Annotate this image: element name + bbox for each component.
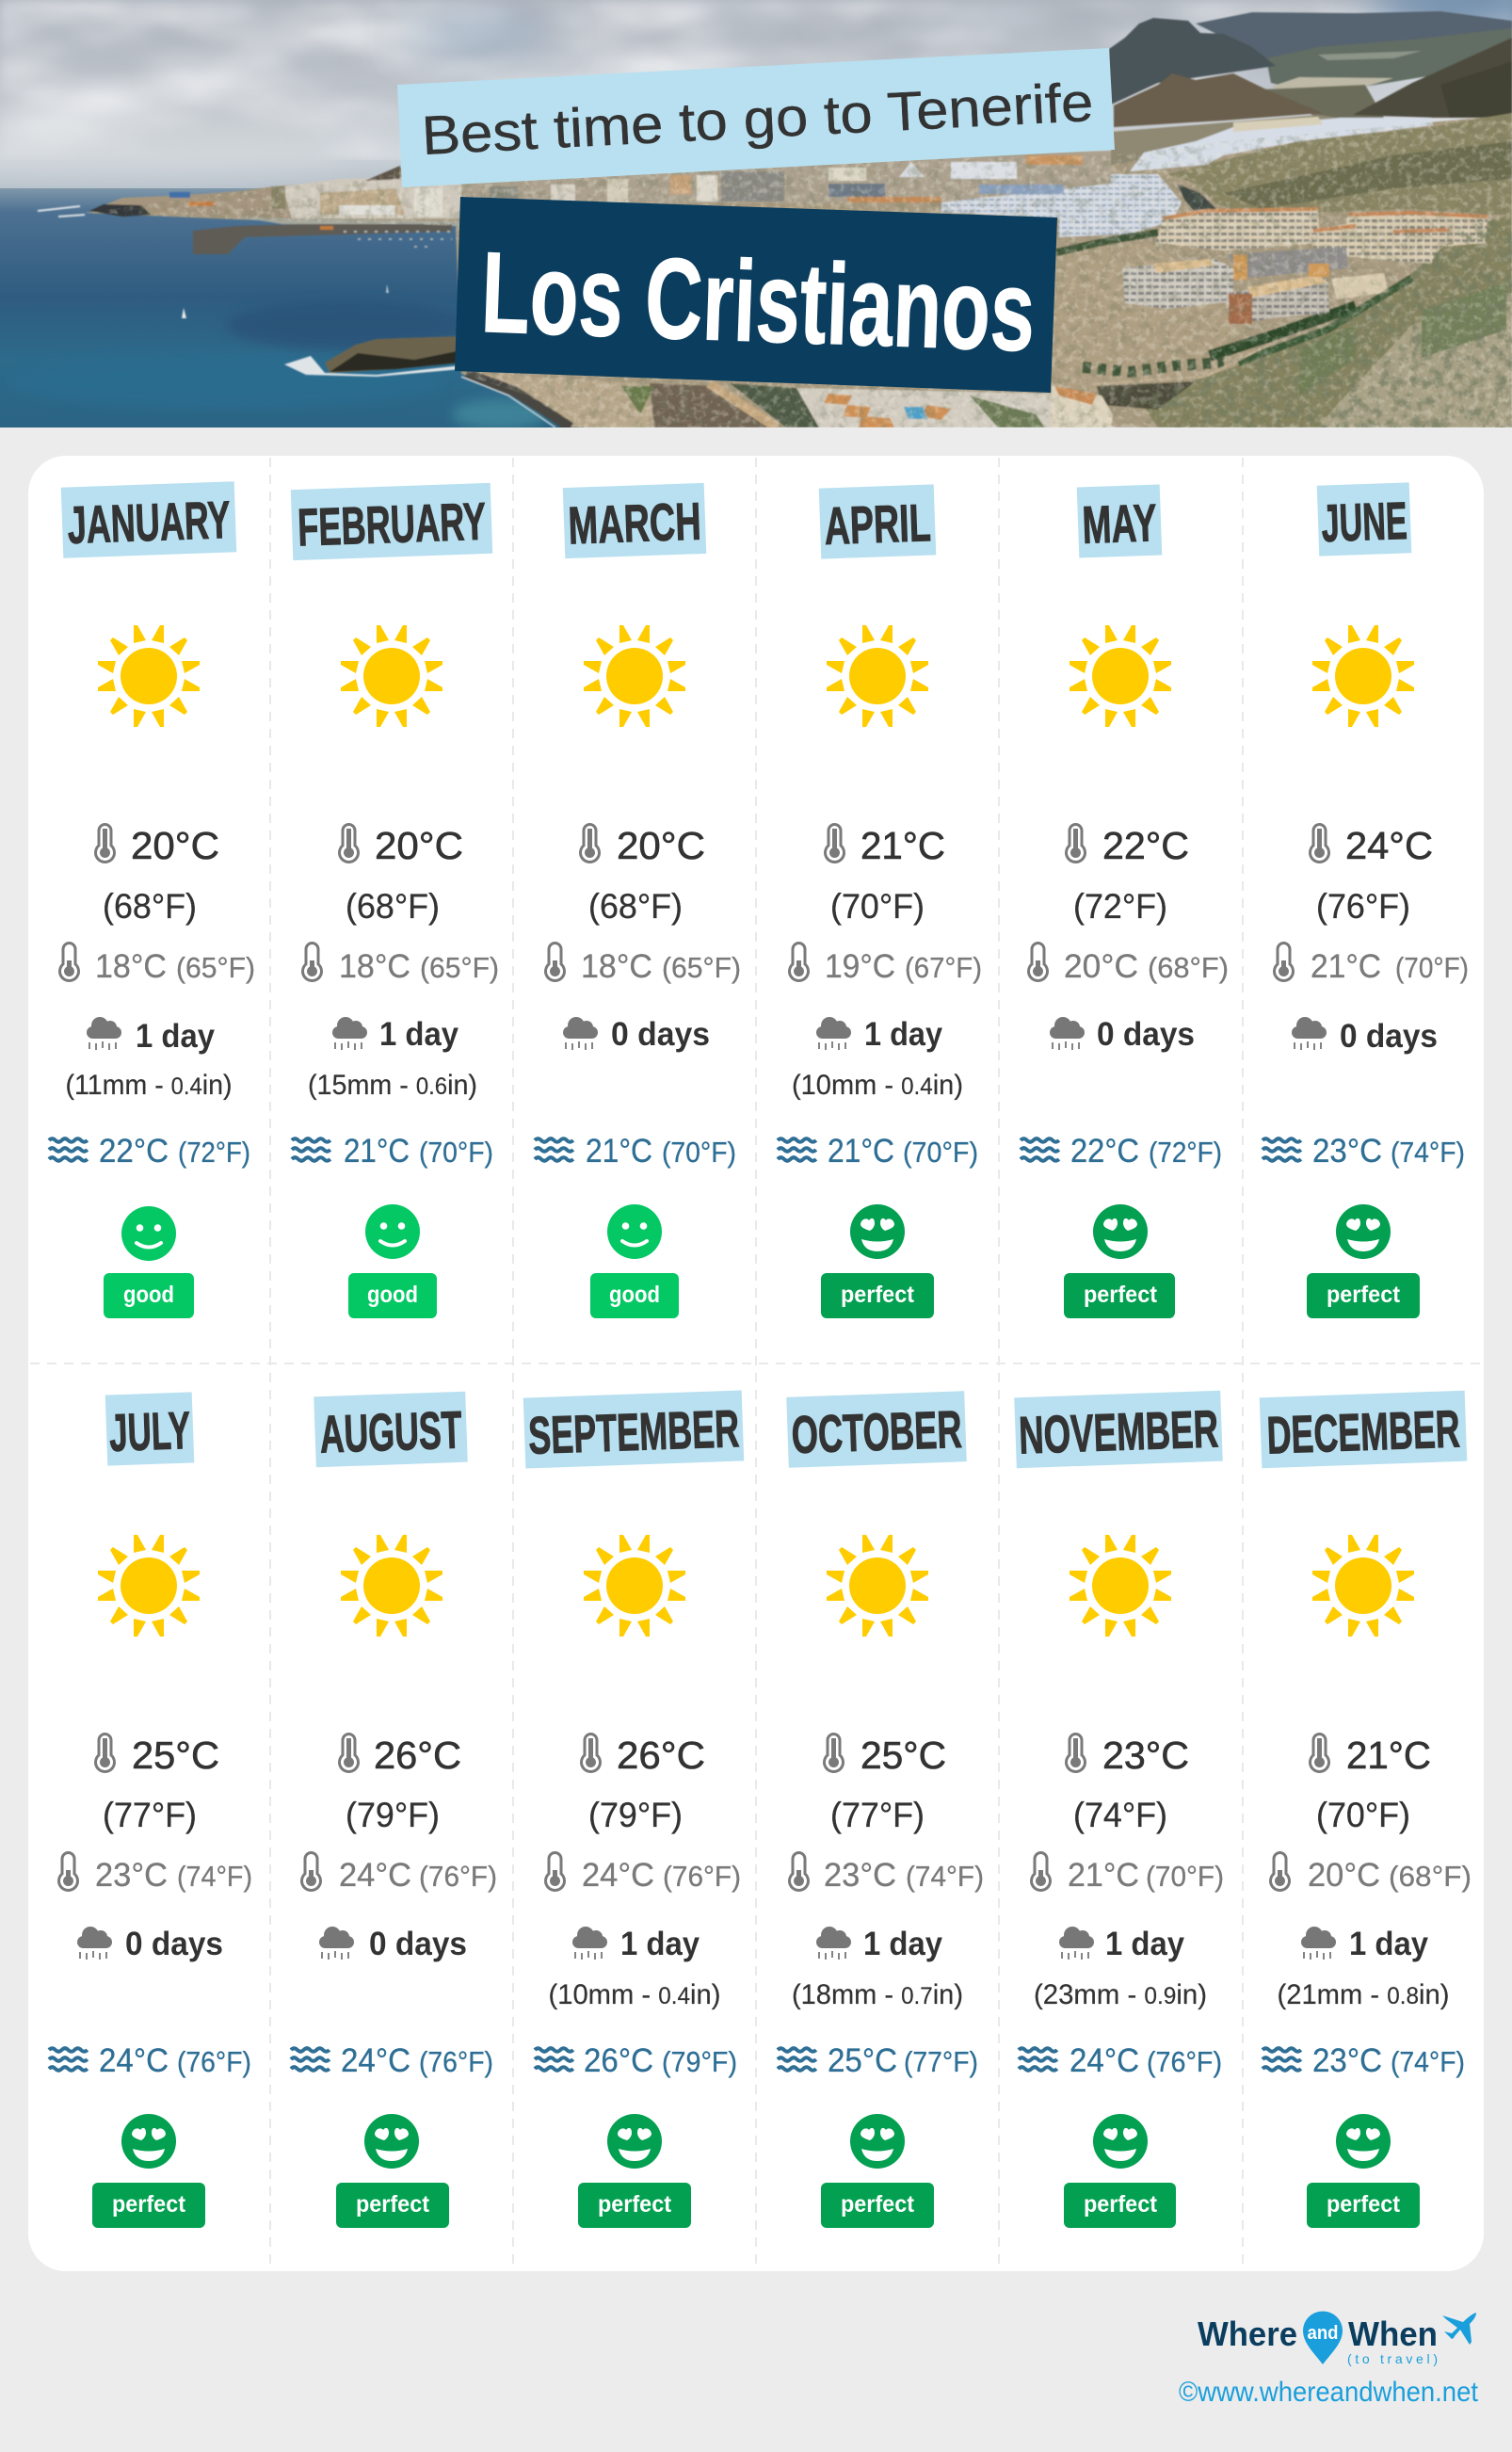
rainfall: 0 days (369, 1926, 467, 1962)
icon: sun (1070, 1535, 1171, 1637)
banner: Los Cristianos: Los Cristianos (479, 228, 1037, 376)
air temperature low: (65°F) (176, 951, 255, 984)
month: August (291, 1392, 497, 2228)
banner: Los Cristianos (455, 197, 1057, 393)
sea temperature: 24°C (1070, 2042, 1139, 2079)
air temperature low: 23°C (824, 1857, 896, 1894)
air temperature high: (77°F) (830, 1796, 925, 1834)
month: December (1260, 1391, 1472, 2228)
lower scrub hillside (1139, 215, 1512, 427)
town behind banners (456, 151, 1111, 203)
banner: Best time to go to Tenerife (397, 48, 1115, 187)
sea temperature: 21°C (828, 1133, 894, 1170)
air temperature high: 24°C (1345, 824, 1433, 867)
rating: perfect (92, 2114, 205, 2228)
air temperature low: (74°F) (177, 1860, 252, 1893)
air temperature low (788, 942, 982, 985)
March label: MARCH (568, 492, 702, 555)
valley floor (1262, 85, 1384, 118)
air temperature low: (65°F) (420, 951, 499, 984)
June label (1317, 482, 1411, 557)
icon: sun (584, 625, 685, 727)
November label: NOVEMBER (1018, 1398, 1219, 1465)
icon: map pin (1303, 2311, 1343, 2364)
rating: perfect: perfect (112, 2191, 186, 2218)
September label (523, 1390, 744, 1469)
rating: perfect: perfect (1327, 1282, 1401, 1308)
air temperature high: 25°C (132, 1734, 219, 1777)
air temperature low: 18°C (581, 948, 652, 985)
air temperature high: (76°F) (1316, 887, 1410, 926)
month: July (49, 1392, 252, 2228)
air temperature high: (68°F) (588, 887, 683, 926)
sea temperature (535, 1133, 736, 1170)
air temperature low (300, 1851, 497, 1894)
air temperature high: 22°C (1102, 824, 1189, 867)
sea temperature (778, 2042, 978, 2079)
sea temperature: (72°F) (1149, 1136, 1222, 1169)
air temperature low: (74°F) (906, 1860, 984, 1893)
logo: Where and When (to travel) (1198, 2311, 1476, 2366)
rating: perfect (1064, 1204, 1175, 1318)
air temperature high (579, 823, 705, 926)
sea temperature (49, 2042, 251, 2079)
air temperature high: 21°C (861, 824, 945, 867)
rainfall: 1 day (863, 1926, 943, 1962)
air temperature high (823, 1733, 946, 1834)
rainfall: 0 days (125, 1926, 223, 1962)
land base (85, 115, 1512, 427)
air temperature high (824, 823, 945, 926)
bottom resort (796, 388, 1116, 427)
air temperature high (94, 1733, 219, 1834)
air temperature low: 23°C (95, 1857, 168, 1894)
month: January (49, 481, 255, 1318)
October label (786, 1391, 967, 1468)
rating: perfect: perfect (1084, 2191, 1158, 2218)
air temperature low (57, 1851, 252, 1894)
sea temperature (1021, 1133, 1222, 1170)
air temperature high: (72°F) (1073, 887, 1167, 926)
January label (61, 481, 236, 558)
rainfall (792, 1926, 963, 2010)
January label: JANUARY (67, 490, 232, 555)
logo: Where and When (to travel): (to travel) (1347, 2351, 1438, 2366)
air temperature high (1065, 1733, 1189, 1834)
sea temperature: (74°F) (1391, 2045, 1465, 2078)
sea temperature: (76°F) (419, 2045, 493, 2078)
sea temperature (778, 1133, 978, 1170)
rainfall: (18mm - 0.7in) (792, 1979, 963, 2010)
sea temperature: 22°C (1070, 1133, 1139, 1170)
scrub hillside upper (1167, 113, 1512, 215)
air temperature high (94, 823, 219, 926)
icon: sun (98, 625, 200, 727)
air temperature low: 20°C (1308, 1857, 1380, 1894)
icon: plane (1442, 2313, 1476, 2345)
August label (314, 1392, 468, 1467)
rainfall (792, 1016, 963, 1101)
icon: sun (341, 625, 442, 727)
rainfall: (10mm - 0.4in) (548, 1979, 720, 2010)
month: November (1014, 1391, 1224, 2228)
April label (819, 484, 936, 559)
beach strip (240, 217, 459, 226)
air temperature low: 24°C (339, 1857, 411, 1894)
air temperature high: (68°F) (103, 887, 197, 926)
air temperature high: 20°C (131, 824, 219, 867)
rainfall: 1 day (1105, 1926, 1185, 1962)
hedge rows (1056, 233, 1158, 252)
header photo: Los Cristianos coastline (0, 0, 1512, 429)
November label (1014, 1391, 1223, 1468)
sea temperature (1263, 1133, 1465, 1170)
air temperature low: 18°C (339, 948, 410, 985)
rainfall: 1 day (379, 1016, 459, 1053)
far ridge (1196, 10, 1512, 59)
banner: Best time to go to Tenerife: Best time to go to Tenerife (420, 72, 1095, 167)
brown double hill (1114, 73, 1323, 127)
August label: AUGUST (319, 1399, 463, 1464)
rainfall (1050, 1016, 1195, 1053)
sea temperature: 25°C (828, 2042, 897, 2079)
rainfall: 0 days (1097, 1016, 1195, 1053)
air temperature high (1065, 823, 1189, 926)
rainfall: (15mm - 0.6in) (308, 1070, 477, 1101)
icon: sun (98, 1535, 200, 1637)
sea temperature: (70°F) (903, 1136, 978, 1169)
sea temperature: 22°C (99, 1133, 169, 1170)
logo: Where and When (to travel): When (1348, 2315, 1438, 2353)
sea temperature (1263, 2042, 1465, 2079)
rainfall: (11mm - 0.4in) (66, 1070, 232, 1101)
air temperature low: (68°F) (1148, 951, 1229, 984)
rating: perfect (1064, 2114, 1176, 2228)
air temperature high: 26°C (617, 1734, 705, 1777)
sea temperature: (76°F) (1147, 2045, 1222, 2078)
rainfall: 1 day (136, 1018, 216, 1055)
sea temperature: 21°C (344, 1133, 410, 1170)
sea temperature: (74°F) (1391, 1136, 1465, 1169)
rainfall: 1 day (864, 1016, 942, 1053)
July label (105, 1392, 194, 1466)
month: February (291, 483, 499, 1318)
rainfall: 0 days (611, 1016, 710, 1053)
air temperature high: (68°F) (346, 887, 440, 926)
air temperature high: (77°F) (103, 1796, 197, 1834)
sea temperature: 26°C (584, 2042, 653, 2079)
icon: sun (584, 1535, 685, 1637)
sea temperature: (77°F) (904, 2045, 978, 2078)
air temperature low (544, 1851, 741, 1894)
icon: sun (341, 1535, 442, 1637)
dark peak (1109, 18, 1276, 105)
air temperature low: (76°F) (419, 1860, 497, 1893)
month: September (523, 1390, 744, 2228)
rating: good (590, 1204, 679, 1318)
sea temperature (49, 1133, 250, 1170)
copyright url: ©www.whereandwhen.net (1179, 2377, 1479, 2408)
June label: JUNE (1321, 491, 1408, 553)
logo: Where and When (to travel): Where (1198, 2315, 1297, 2353)
rating: good: good (367, 1282, 418, 1308)
rainfall (563, 1016, 710, 1053)
air temperature high (580, 1733, 705, 1834)
air temperature low: (67°F) (905, 951, 982, 984)
rating: good: good (609, 1282, 660, 1308)
white terraces (1130, 118, 1433, 171)
air temperature low: 21°C (1311, 948, 1381, 985)
cream apartment blocks (1156, 209, 1320, 250)
July label: JULY (108, 1400, 191, 1462)
sea temperature: (70°F) (419, 1136, 493, 1169)
February label: FEBRUARY (297, 492, 487, 557)
panel: monthly climate table (28, 456, 1484, 2271)
rating: perfect: perfect (356, 2191, 430, 2218)
March label (563, 483, 706, 558)
air temperature low: (70°F) (1146, 1860, 1224, 1893)
air temperature high: 25°C (861, 1734, 946, 1777)
rainfall: 0 days (1340, 1018, 1438, 1055)
sea temperature: 24°C (99, 2042, 169, 2079)
rating: perfect (821, 1204, 934, 1318)
sea temperature: (72°F) (178, 1136, 250, 1169)
rainfall (548, 1926, 720, 2010)
air temperature low: (70°F) (1395, 951, 1469, 984)
rainfall: (23mm - 0.9in) (1034, 1979, 1207, 2010)
sea temperature (291, 2042, 493, 2079)
sea temperature: 24°C (341, 2042, 410, 2079)
rainfall: 1 day (1349, 1926, 1429, 1962)
sea temperature (535, 2042, 737, 2079)
air temperature low: (68°F) (1389, 1860, 1472, 1893)
rainfall (77, 1926, 223, 1962)
icon: map pin: and (1307, 2323, 1339, 2344)
September label: SEPTEMBER (527, 1398, 740, 1465)
icon: sun (1312, 1535, 1414, 1637)
ground texture (0, 113, 1512, 427)
rocky island (284, 356, 461, 377)
icon: sun (1070, 625, 1171, 727)
month: May (1021, 484, 1229, 1318)
air temperature high: (70°F) (830, 887, 925, 926)
sea temperature (292, 1133, 493, 1170)
air temperature low (1273, 942, 1469, 985)
air temperature high: (79°F) (346, 1796, 440, 1834)
rating: good (348, 1204, 437, 1318)
October label: OCTOBER (791, 1399, 963, 1464)
air temperature low: 24°C (582, 1857, 654, 1894)
air temperature low: 18°C (95, 948, 167, 985)
May label (1077, 484, 1162, 558)
rating: perfect: perfect (598, 2191, 672, 2218)
left town on the horizon (105, 191, 235, 206)
sea temperature: (76°F) (177, 2045, 251, 2078)
month: October (778, 1391, 984, 2228)
sail boats (182, 308, 186, 318)
slope texture (1130, 212, 1512, 427)
right dark hill (1353, 38, 1512, 118)
rating: perfect (578, 2114, 691, 2228)
rainfall (319, 1926, 467, 1962)
air temperature high: 20°C (617, 824, 705, 867)
month: March (535, 483, 741, 1318)
sea temperature: (70°F) (662, 1136, 736, 1169)
air temperature low: (76°F) (663, 1860, 741, 1893)
air temperature low: 21°C (1068, 1857, 1139, 1894)
rainfall (1034, 1926, 1207, 2010)
dirt and vegetation below banner (650, 383, 772, 427)
rating: good (104, 1206, 194, 1318)
sea temperature: 23°C (1312, 1133, 1382, 1170)
air temperature high: 23°C (1102, 1734, 1189, 1777)
rainfall: (10mm - 0.4in) (792, 1070, 963, 1101)
rainfall (308, 1016, 477, 1101)
May label: MAY (1082, 492, 1158, 555)
air temperature high (1309, 1733, 1431, 1834)
icon: sun (827, 625, 928, 727)
air temperature low (1027, 942, 1229, 985)
icon: sun (1312, 625, 1414, 727)
distant town (1271, 76, 1393, 89)
air temperature low (301, 942, 499, 985)
air temperature high (338, 823, 463, 926)
sea temperature: 21°C (586, 1133, 652, 1170)
rainfall (1277, 1926, 1450, 2010)
air temperature high: (70°F) (1316, 1796, 1410, 1834)
air temperature low (788, 1851, 984, 1894)
air temperature low: (65°F) (662, 951, 741, 984)
icon: sun (827, 1535, 928, 1637)
air temperature low: 19°C (825, 948, 895, 985)
rating: perfect: perfect (841, 1282, 915, 1308)
rating: perfect (336, 2114, 449, 2228)
air temperature high (1309, 823, 1433, 926)
harbour mole (193, 224, 452, 254)
month: June (1263, 482, 1469, 1318)
rating: perfect (1307, 2114, 1420, 2228)
beach and shoreline (485, 375, 654, 427)
air temperature high (338, 1733, 461, 1834)
sea temperature: 23°C (1312, 2042, 1382, 2079)
rating: perfect (1307, 1204, 1420, 1318)
rainfall: (21mm - 0.8in) (1277, 1979, 1450, 2010)
air temperature low (544, 942, 741, 985)
air temperature high: 21°C (1346, 1734, 1431, 1777)
air temperature high: (74°F) (1073, 1796, 1167, 1834)
air temperature high: 26°C (374, 1734, 461, 1777)
rainfall (1292, 1017, 1438, 1055)
rating: good: good (123, 1282, 174, 1308)
air temperature high: (79°F) (588, 1796, 683, 1834)
rainfall (66, 1017, 232, 1101)
air temperature low (58, 942, 255, 985)
air temperature low (1269, 1851, 1472, 1894)
air temperature low (1030, 1851, 1224, 1894)
grey lower blocks (1122, 259, 1233, 309)
month: April (778, 484, 982, 1318)
rating: perfect (821, 2114, 934, 2228)
rating: perfect: perfect (1327, 2191, 1401, 2218)
sea temperature (1019, 2042, 1222, 2079)
soil plain (1052, 243, 1252, 395)
air temperature high: 20°C (375, 824, 463, 867)
February label (291, 483, 492, 560)
rating: perfect: perfect (841, 2191, 915, 2218)
rating: perfect: perfect (1084, 1282, 1158, 1308)
air temperature low: 20°C (1064, 948, 1138, 985)
sea temperature: (79°F) (662, 2045, 737, 2078)
rainfall: 1 day (620, 1926, 700, 1962)
April label: APRIL (824, 492, 932, 556)
